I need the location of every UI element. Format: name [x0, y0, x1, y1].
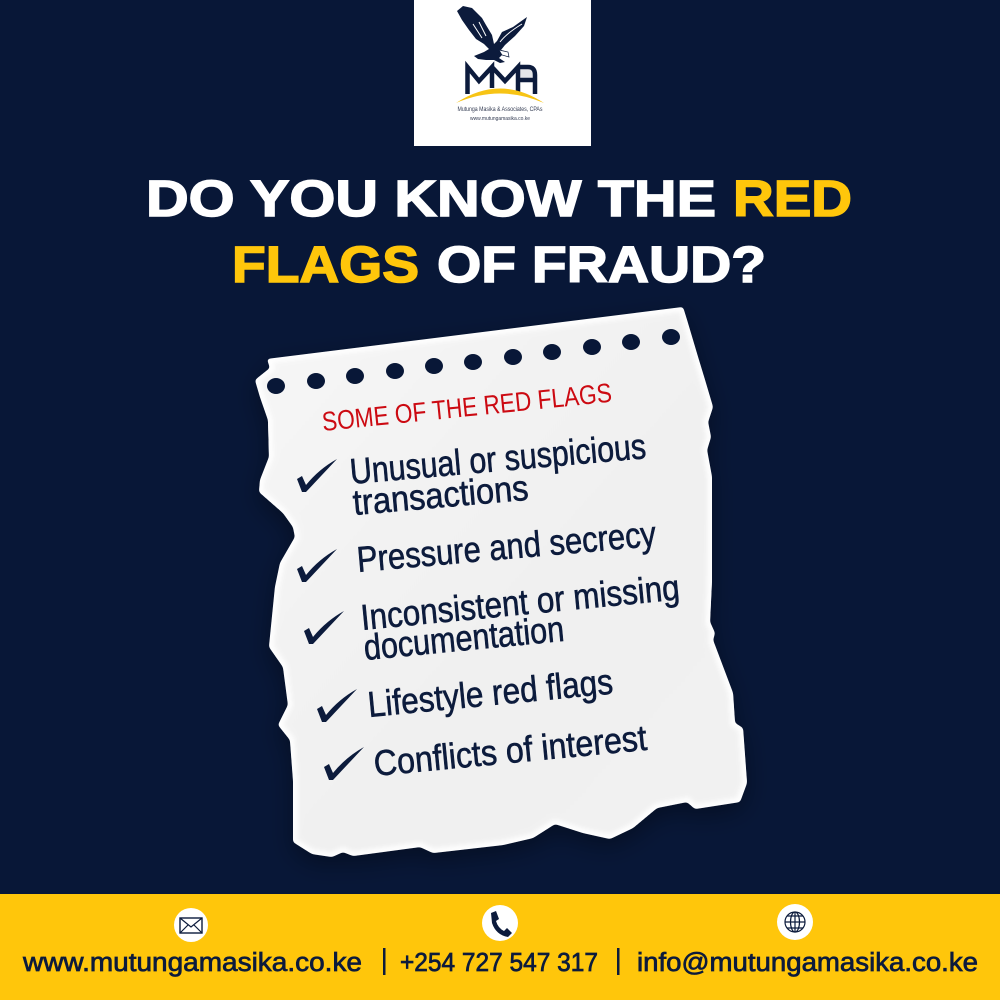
icon: eagle	[457, 6, 527, 63]
phone number: +254 727 547 317	[400, 949, 598, 977]
logo company name: Mutunga Masika & Associates, CPAs	[458, 106, 542, 113]
item: lifestyle red flags: Lifestyle red flags	[366, 661, 615, 725]
logo panel	[414, 0, 591, 146]
item: unusual transactions: Unusual or suspicious	[348, 425, 648, 492]
title line 1 white: DO YOU KNOW THE	[146, 170, 716, 227]
email: info@mutungamasika.co.ke	[637, 949, 978, 977]
footer band	[0, 894, 1000, 1000]
item: unusual transactions	[348, 425, 648, 523]
panel: torn paper note	[250, 300, 750, 860]
item: inconsistent documentation: Inconsistent or missing	[359, 566, 681, 638]
paper sheet	[250, 300, 750, 860]
note heading: SOME OF THE RED FLAGS	[321, 378, 613, 437]
icon: envelope	[174, 908, 208, 942]
icon: check marks	[297, 459, 364, 780]
item: pressure and secrecy: Pressure and secrecy	[355, 513, 658, 580]
contact row	[22, 949, 978, 977]
title line 2 white: OF FRAUD?	[437, 236, 766, 293]
title line 2 yellow: FLAGS	[232, 236, 419, 293]
item: inconsistent documentation	[359, 566, 681, 668]
website: www.mutungamasika.co.ke	[22, 949, 362, 977]
item: conflicts of interest: Conflicts of interest	[372, 717, 649, 784]
punched holes	[267, 329, 680, 394]
icon: globe	[777, 904, 813, 940]
icon: MMA letters	[468, 67, 536, 94]
logo web address: www.mutungamasika.co.ke	[470, 116, 530, 122]
item: unusual transactions: transactions	[351, 467, 530, 523]
title	[146, 170, 852, 293]
icon: phone	[482, 905, 518, 941]
title line 1 yellow: RED	[733, 170, 852, 227]
item: inconsistent documentation: documentation	[362, 608, 566, 668]
icon: yellow arc	[456, 88, 544, 103]
